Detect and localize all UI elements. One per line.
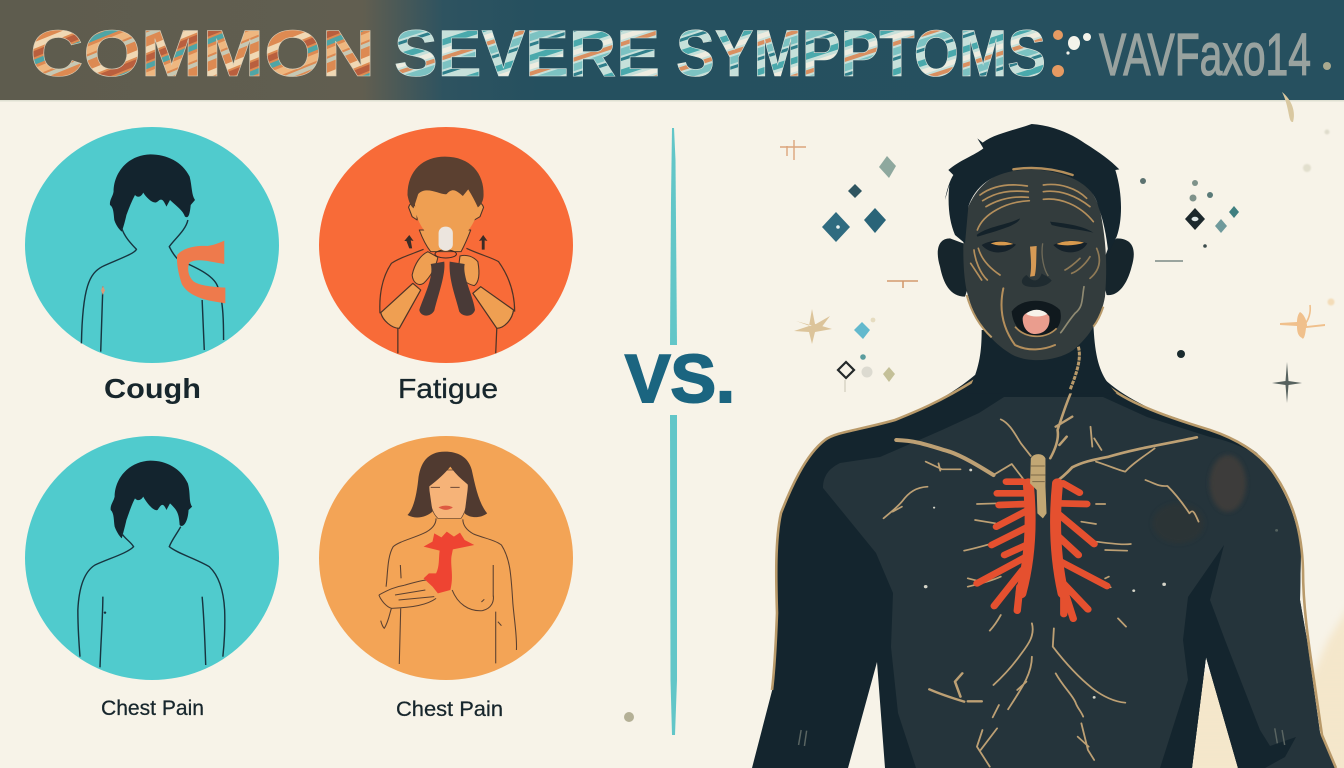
jaw rim	[967, 295, 1103, 337]
hair	[945, 124, 1121, 253]
neck	[967, 323, 1117, 393]
chest pain orange circle	[319, 436, 573, 680]
label: chest pain right: Chest Pain	[396, 698, 503, 721]
sternum	[1030, 454, 1047, 518]
nose	[1030, 246, 1037, 277]
divider line lower	[670, 415, 677, 735]
brows	[977, 218, 1093, 237]
chest details	[799, 382, 1285, 767]
torso arm shadow bands	[1160, 545, 1296, 768]
ears	[938, 238, 972, 297]
icon: chest pain silhouette	[78, 461, 225, 667]
white specks	[924, 469, 1278, 699]
header end dot	[1323, 62, 1331, 70]
head	[938, 124, 1134, 393]
shoulder rim highlights	[772, 380, 1336, 768]
divider line upper	[670, 128, 677, 345]
fatigue circle	[319, 127, 573, 363]
label: chest pain left: Chest Pain	[101, 697, 204, 720]
icon: fatigue figure with inhaler	[380, 157, 515, 353]
panel: chest pain orange	[319, 436, 573, 721]
cough circle	[25, 127, 279, 363]
sparkles right	[1140, 92, 1334, 403]
title colon dots	[1052, 30, 1091, 77]
face	[963, 168, 1106, 360]
header banner	[0, 0, 1344, 102]
eyes	[982, 241, 1087, 252]
title: SEVERE	[394, 16, 660, 90]
title: COMMON	[30, 16, 375, 90]
panel: fatigue	[319, 127, 573, 404]
sparkles left	[780, 140, 918, 392]
chest lighter area	[823, 397, 1335, 768]
icon: woman with chest pain	[379, 452, 517, 664]
ribs	[977, 482, 1107, 619]
chest pain teal circle	[25, 436, 279, 680]
mouth	[1012, 301, 1061, 337]
panel: cough	[25, 127, 279, 404]
wrinkles	[971, 168, 1099, 349]
icon: cough figure	[81, 154, 225, 352]
sand texture corner	[1188, 605, 1344, 768]
label: cough: Cough	[104, 373, 201, 404]
collar and trunk cracks	[884, 382, 1199, 767]
title: SYMPPTOMS	[676, 16, 1046, 90]
illustration: severe patient	[752, 124, 1336, 768]
label: fatigue: Fatigue	[398, 373, 498, 404]
title	[30, 16, 1046, 90]
panel: chest pain teal	[25, 436, 279, 720]
decorative dot	[624, 712, 634, 722]
body silhouette	[752, 375, 1335, 768]
vs label: VS.	[625, 341, 735, 417]
